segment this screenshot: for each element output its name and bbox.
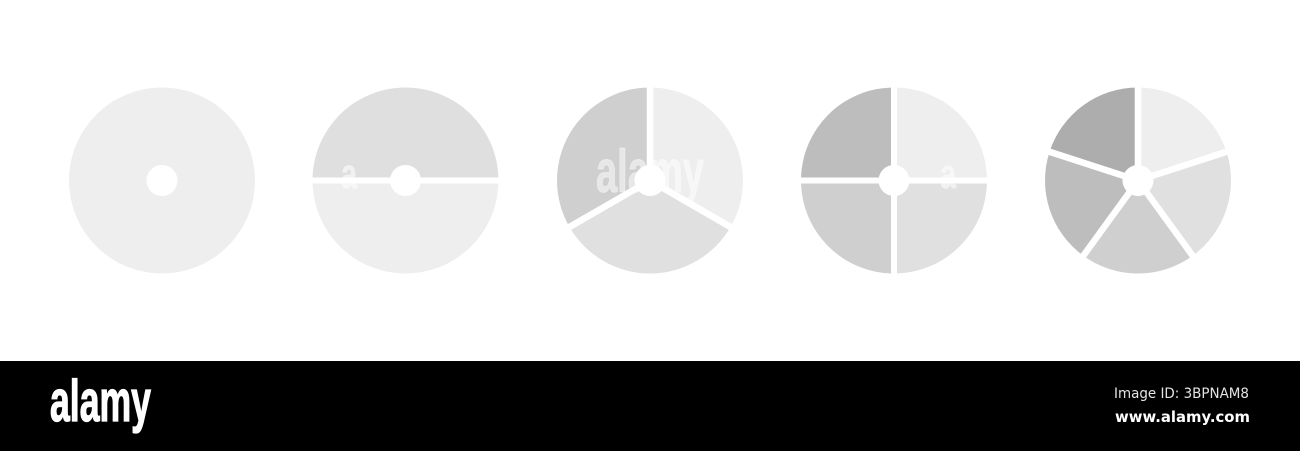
pie: one whole segment: [69, 88, 255, 274]
watermark: alamy over three-segment pie: alamy: [596, 138, 704, 205]
footer website: www.alamy.com: [1115, 408, 1250, 426]
watermark fragment: left of two-segment pie: a: [341, 150, 357, 197]
pie: three segments: [557, 80, 743, 273]
footer image id: Image ID: 3BPNAM8: [1114, 386, 1249, 402]
footer logo: alamy: alamy: [50, 369, 151, 434]
pie: five segments: [1043, 80, 1233, 273]
pie: two segments: [308, 88, 503, 274]
footer bar: [0, 361, 1300, 451]
watermark fragment: right of four-segment pie: a: [940, 150, 956, 197]
pie: four segments: [796, 82, 992, 279]
